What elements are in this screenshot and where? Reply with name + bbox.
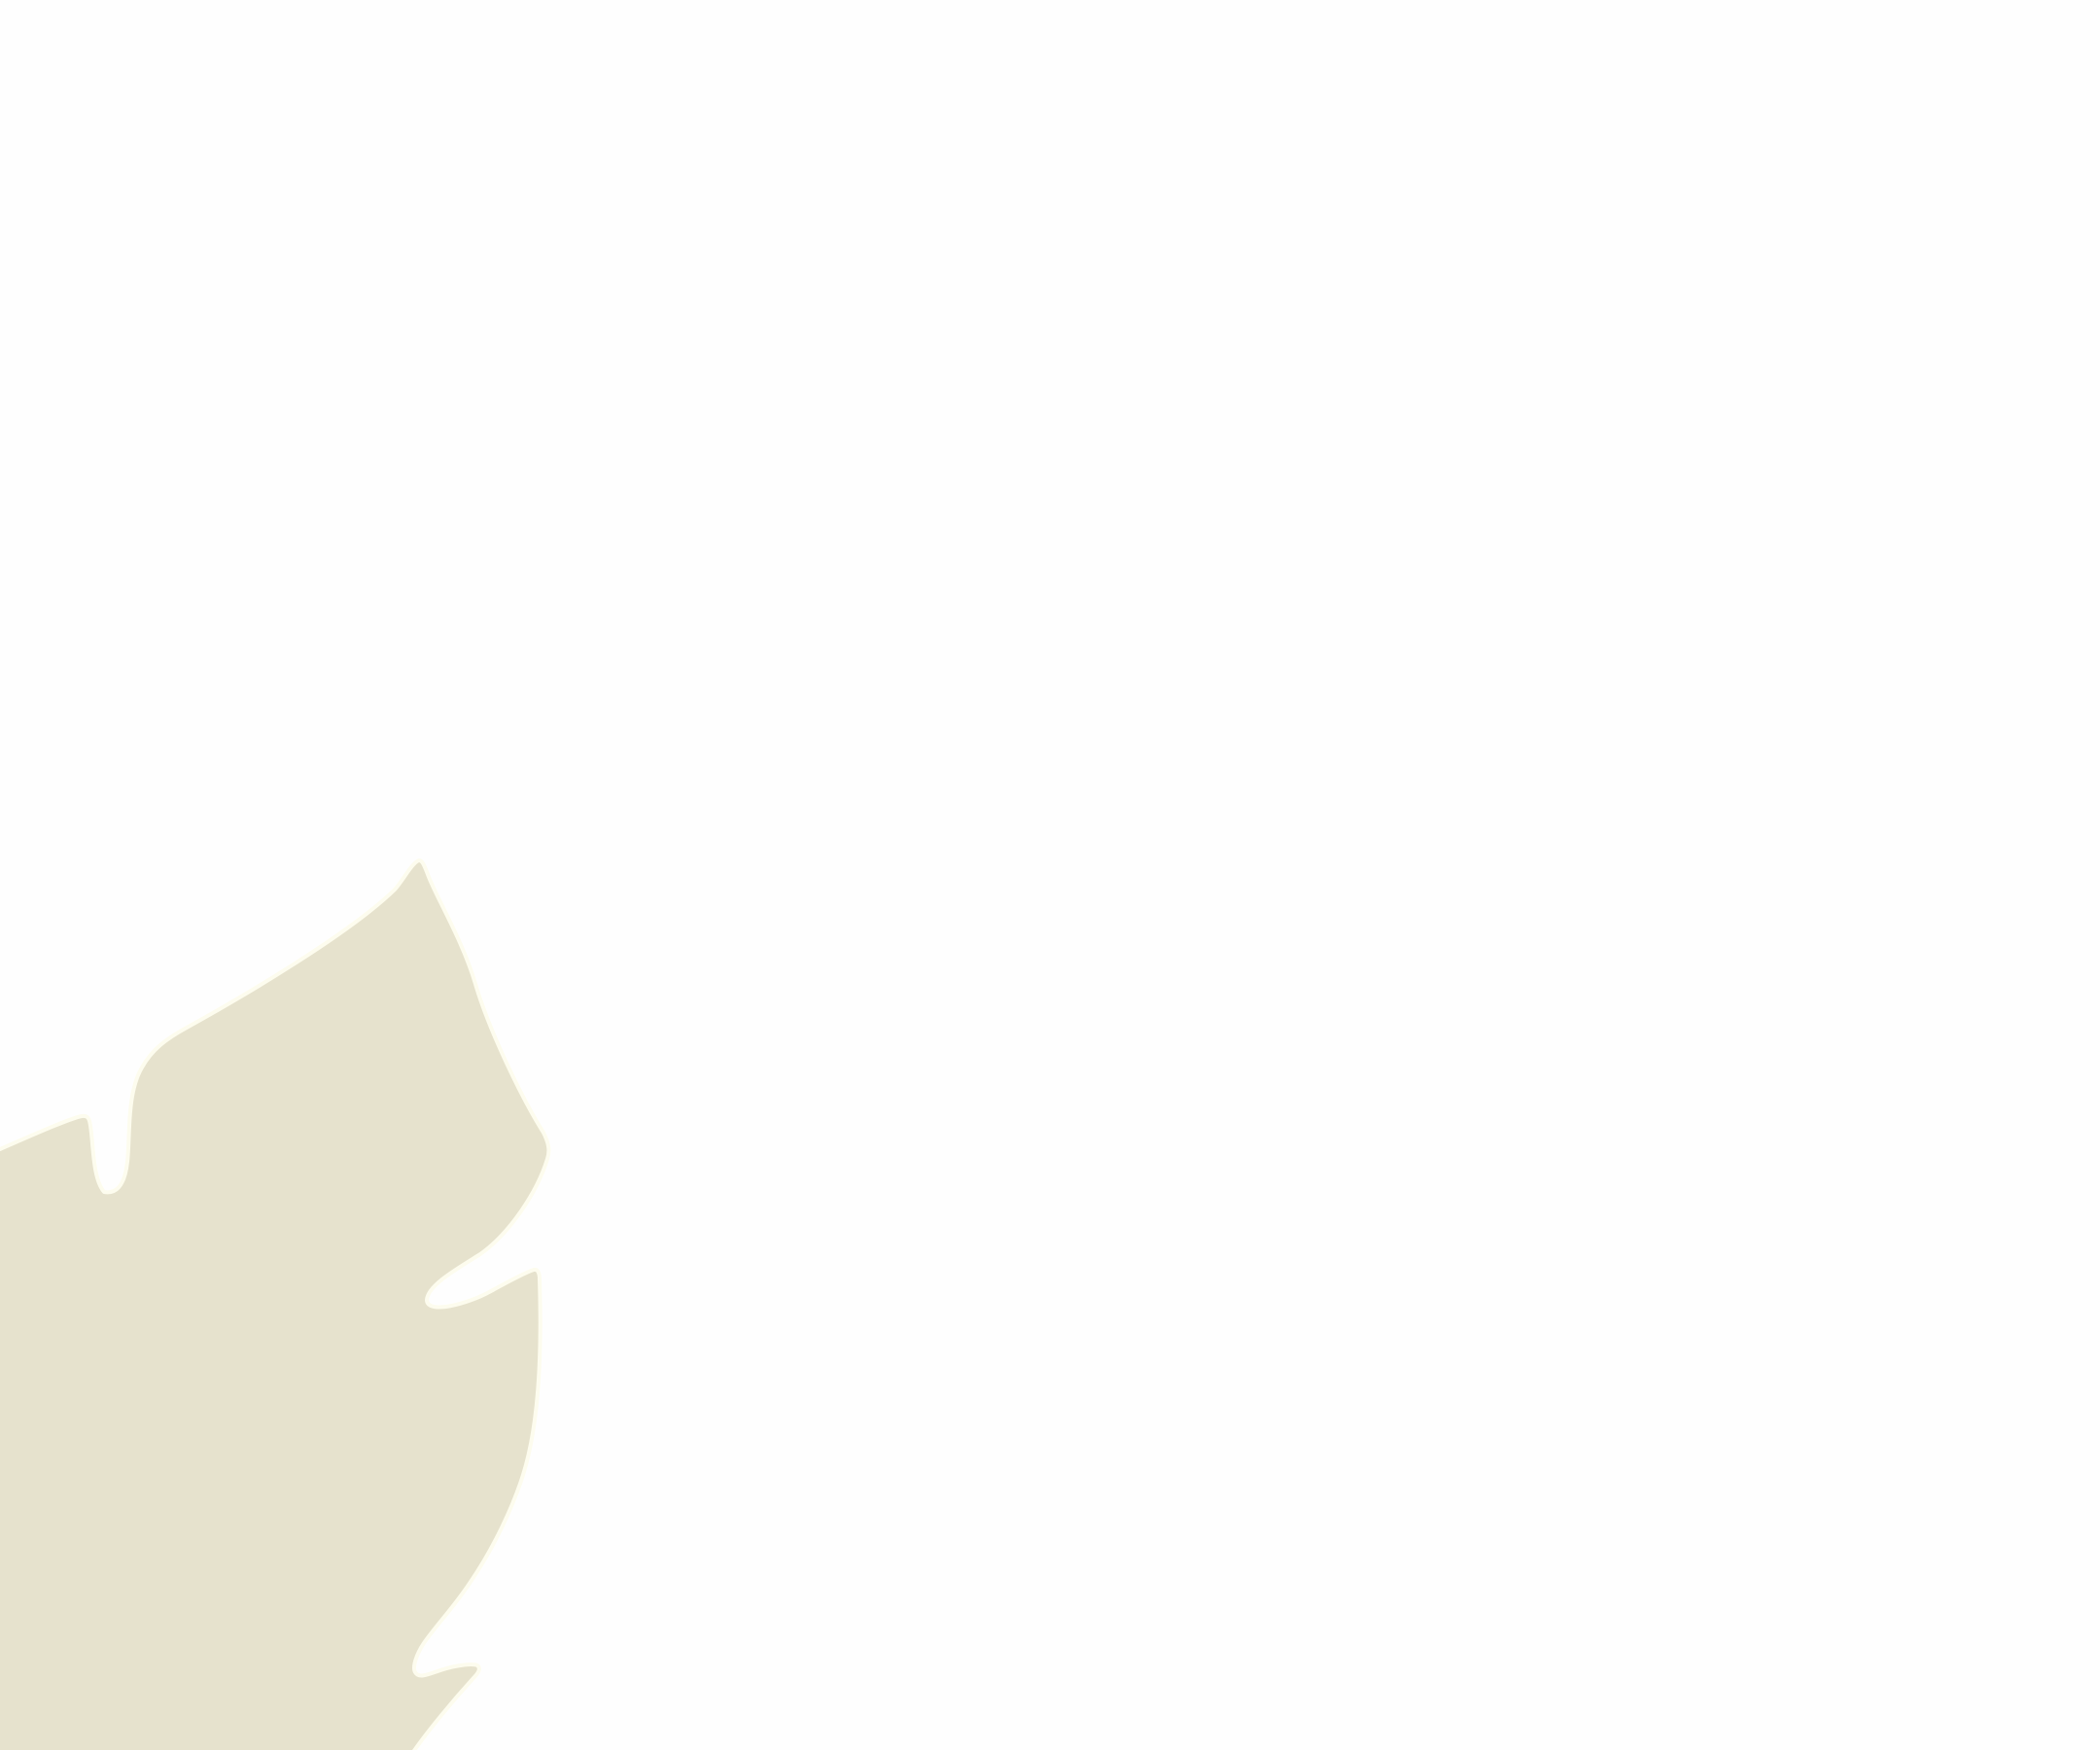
icon: monstera leaf silhouette bbox=[0, 860, 548, 1750]
